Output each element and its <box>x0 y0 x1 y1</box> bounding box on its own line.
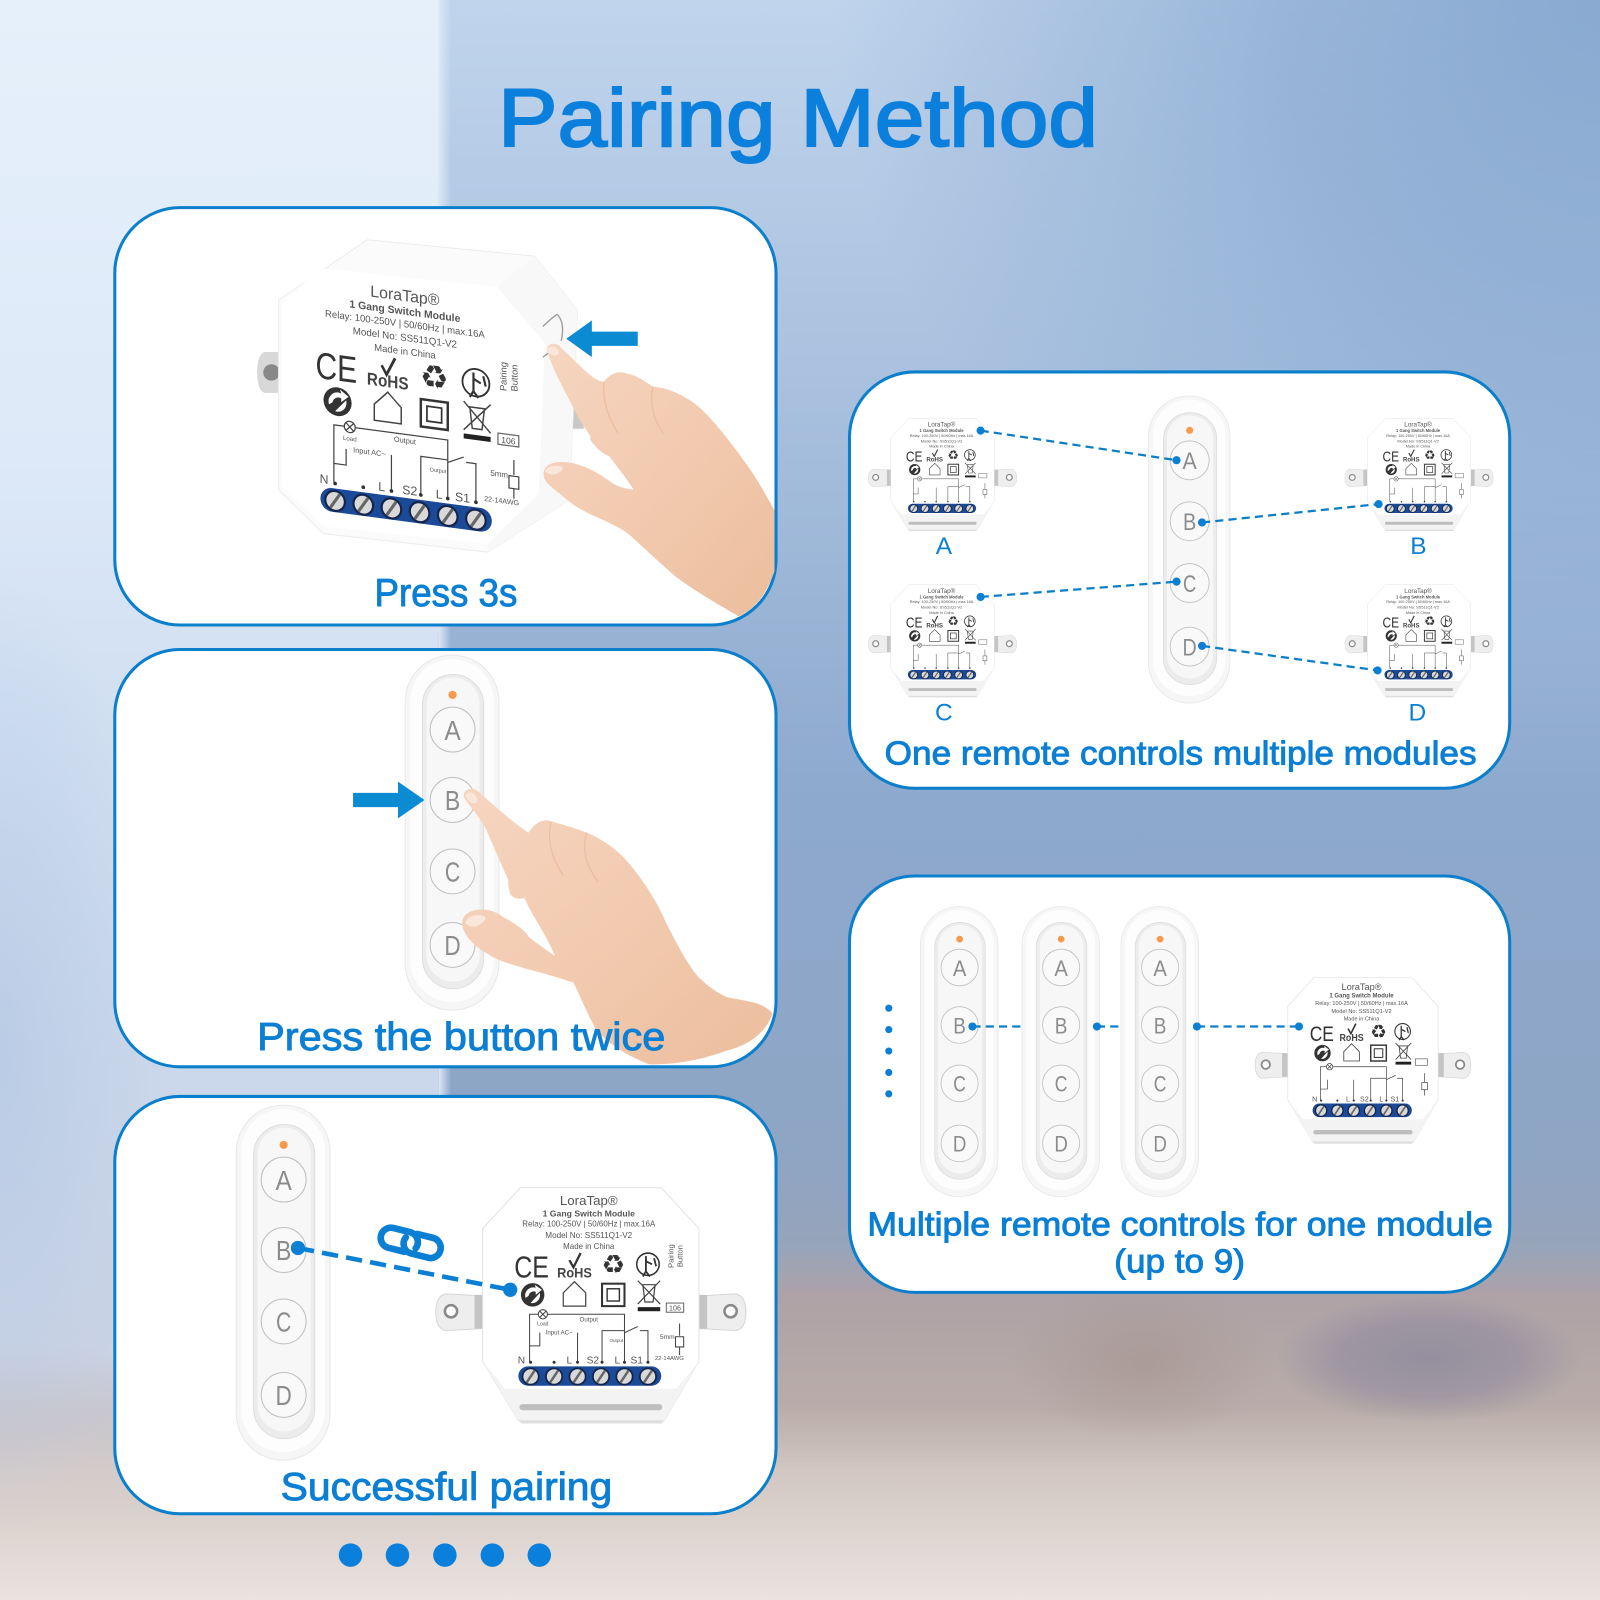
switch module in perspective: Output <box>394 435 417 447</box>
remote 3 <box>1121 907 1198 1197</box>
switch module: Made in China <box>1344 1017 1380 1023</box>
switch module: L <box>1379 1095 1383 1103</box>
switch module in perspective: L <box>436 487 443 502</box>
remote control: C <box>276 1307 291 1338</box>
module B: 1 Gang Switch Module <box>1396 428 1441 433</box>
caption: Multiple remote controls for one module <box>867 1207 1493 1244</box>
module B: RoHS <box>1403 456 1420 463</box>
switch module: L <box>1346 1095 1350 1103</box>
switch module in perspective: L <box>378 479 385 494</box>
module D: Relay: 100-250V | 50/60Hz | max.16A <box>1386 600 1450 604</box>
hand pressing remote <box>462 789 772 1064</box>
remote control: B <box>276 1235 291 1266</box>
switch module: CE <box>1310 1022 1334 1046</box>
switch module in perspective: RoHS <box>367 368 409 394</box>
panel: multiple remote controls <box>849 876 1510 1292</box>
panel: successful pairing <box>115 1096 776 1514</box>
remote 2: C <box>1055 1072 1067 1097</box>
module A: Made in China <box>929 445 955 449</box>
module B: CE <box>1382 449 1399 465</box>
module A <box>868 418 1017 531</box>
switch module in perspective: Made in China <box>374 343 436 362</box>
switch module in perspective: ♻ <box>420 356 449 398</box>
module B: Made in China <box>1406 445 1431 449</box>
module labels: A <box>936 533 953 560</box>
module D: LoraTap® <box>1404 587 1432 595</box>
remote control: C <box>1183 571 1196 598</box>
arrow: pointing at button B <box>353 782 424 818</box>
module labels: C <box>935 699 953 726</box>
remote control: A <box>1183 448 1197 475</box>
caption: Successful pairing <box>281 1466 612 1509</box>
icon: chain link <box>379 1226 443 1260</box>
module D: 1 Gang Switch Module <box>1396 594 1441 599</box>
module labels <box>935 533 1427 726</box>
switch module: Model No: SS511Q1-V2 <box>545 1231 633 1240</box>
module C: RoHS <box>926 623 943 630</box>
module B: Model No: SS511Q1-V2 <box>1397 438 1439 443</box>
module D: RoHS <box>1403 623 1420 630</box>
remote control <box>236 1105 330 1460</box>
switch module: Made in China <box>563 1242 615 1251</box>
switch module: 106 <box>669 1305 681 1313</box>
panel: one remote controls multiple modules <box>849 372 1510 788</box>
module C: CE <box>906 616 923 632</box>
switch module in perspective: Load <box>343 435 357 444</box>
switch module in perspective: S1 <box>455 490 470 506</box>
switch module: 1 Gang Switch Module <box>543 1208 635 1218</box>
module A: ♻ <box>948 447 959 462</box>
switch module: S2 <box>587 1355 599 1366</box>
title: Pairing Method <box>498 73 1098 164</box>
module A: Model No: SS511Q1-V2 <box>921 438 962 443</box>
caption second line: (up to 9) <box>1114 1243 1245 1280</box>
module C: LoraTap® <box>928 587 956 595</box>
switch module in perspective: CE <box>316 343 357 391</box>
remote 2: D <box>1054 1132 1068 1157</box>
switch module in perspective: Button <box>510 364 520 392</box>
remote control <box>405 655 499 1010</box>
module B: Relay: 100-250V | 50/60Hz | max.16A <box>1386 434 1450 438</box>
remote 1: A <box>953 956 967 981</box>
module D: Made in China <box>1406 611 1431 615</box>
panel: press the button twice <box>115 649 776 1067</box>
remote control: B <box>1183 509 1196 536</box>
switch module in perspective: Output <box>430 467 447 475</box>
switch module in perspective <box>257 240 604 552</box>
module A: Relay: 100-250V | 50/60Hz | max.16A <box>910 434 974 438</box>
module C: ♻ <box>948 614 959 629</box>
caption: Press 3s <box>374 572 517 615</box>
switch module: ♻ <box>601 1249 625 1280</box>
switch module: Button <box>676 1245 685 1267</box>
remote control: A <box>444 715 461 746</box>
vertical ellipsis dots <box>885 1005 892 1097</box>
switch module: Output <box>609 1338 624 1343</box>
pagination dots <box>339 1543 551 1567</box>
module D: Model No: SS511Q1-V2 <box>1397 605 1439 610</box>
dashed links <box>977 427 1383 674</box>
module D <box>1345 585 1493 697</box>
remote 1: B <box>953 1013 966 1038</box>
module C: Relay: 100-250V | 50/60Hz | max.16A <box>910 600 974 604</box>
remote control: D <box>1183 634 1197 661</box>
switch module in perspective: Model No: SS511Q1-V2 <box>353 326 457 351</box>
module D: CE <box>1382 616 1399 632</box>
switch module in perspective: 22-14AWG <box>484 494 519 508</box>
module A: LoraTap® <box>928 421 956 429</box>
remote control: A <box>276 1165 292 1196</box>
remote 1 <box>920 907 998 1197</box>
hand pressing module <box>544 344 774 616</box>
module C: Made in China <box>929 611 955 615</box>
dashed links <box>968 1022 1303 1031</box>
switch module: Output <box>580 1316 598 1323</box>
switch module in perspective: 5mm <box>490 469 508 480</box>
module A: 1 Gang Switch Module <box>920 428 964 433</box>
caption: Press the button twice <box>257 1016 665 1059</box>
switch module in perspective: Relay: 100-250V | 50/60Hz | max.16A <box>325 309 485 341</box>
module A: CE <box>906 449 923 465</box>
switch module: Input AC~ <box>546 1330 573 1337</box>
remote control: D <box>444 930 461 961</box>
switch module: ♻ <box>1370 1022 1387 1043</box>
dashed pairing link <box>291 1241 517 1297</box>
module B: ♻ <box>1424 447 1435 462</box>
switch module: N <box>518 1355 525 1366</box>
switch module in perspective: N <box>320 472 329 487</box>
switch module: Load <box>537 1322 549 1328</box>
switch module in perspective: S2 <box>402 483 417 499</box>
switch module in perspective: Pairing <box>499 361 509 392</box>
module labels: D <box>1409 699 1426 726</box>
remote 2: A <box>1054 956 1069 981</box>
switch module: Relay: 100-250V | 50/60Hz | max.16A <box>1315 1001 1408 1007</box>
remote 3: A <box>1153 956 1168 981</box>
switch module: Relay: 100-250V | 50/60Hz | max.16A <box>522 1220 656 1229</box>
switch module: S1 <box>1391 1095 1399 1103</box>
remote control: C <box>445 857 460 888</box>
switch module: 1 Gang Switch Module <box>1329 994 1394 1000</box>
switch module: Model No: SS511Q1-V2 <box>1331 1009 1392 1015</box>
remote control: B <box>445 785 460 816</box>
remote 2: B <box>1055 1013 1067 1038</box>
switch module <box>436 1188 746 1423</box>
remote 2 <box>1022 907 1099 1197</box>
switch module: RoHS <box>557 1266 592 1282</box>
module labels: B <box>1410 533 1427 560</box>
switch module: RoHS <box>1340 1033 1364 1044</box>
switch module: L <box>567 1355 573 1366</box>
switch module: S1 <box>631 1355 643 1366</box>
arrow: pointing at pairing button <box>566 320 638 357</box>
switch module: N <box>1312 1095 1317 1103</box>
switch module in perspective: 106 <box>501 435 516 447</box>
module C <box>868 585 1017 697</box>
remote 1: D <box>953 1132 966 1157</box>
module B: LoraTap® <box>1404 421 1432 429</box>
remote 3: D <box>1153 1132 1167 1157</box>
remote 3: B <box>1154 1013 1166 1038</box>
switch module <box>1255 978 1471 1144</box>
switch module: 5mm <box>660 1334 675 1341</box>
remote control: D <box>276 1380 292 1411</box>
switch module: L <box>615 1355 621 1366</box>
module C: 1 Gang Switch Module <box>920 594 964 599</box>
switch module: CE <box>514 1251 549 1285</box>
switch module: 22-14AWG <box>655 1356 684 1362</box>
switch module: LoraTap® <box>560 1193 618 1208</box>
panel: press 3s <box>115 208 776 625</box>
module A: RoHS <box>926 456 943 463</box>
remote 3: C <box>1154 1072 1166 1097</box>
remote control <box>1148 396 1230 703</box>
switch module: S2 <box>1360 1095 1369 1103</box>
module D: ♻ <box>1424 614 1435 629</box>
caption: One remote controls multiple modules <box>885 735 1477 772</box>
remote 1: C <box>953 1072 966 1097</box>
module B <box>1345 418 1493 531</box>
switch module: Pairing <box>666 1244 675 1268</box>
switch module in perspective: LoraTap® <box>370 282 440 310</box>
module C: Model No: SS511Q1-V2 <box>921 605 962 610</box>
switch module in perspective: Input AC~ <box>353 445 386 459</box>
switch module in perspective: 1 Gang Switch Module <box>349 298 461 325</box>
switch module: LoraTap® <box>1341 982 1382 992</box>
